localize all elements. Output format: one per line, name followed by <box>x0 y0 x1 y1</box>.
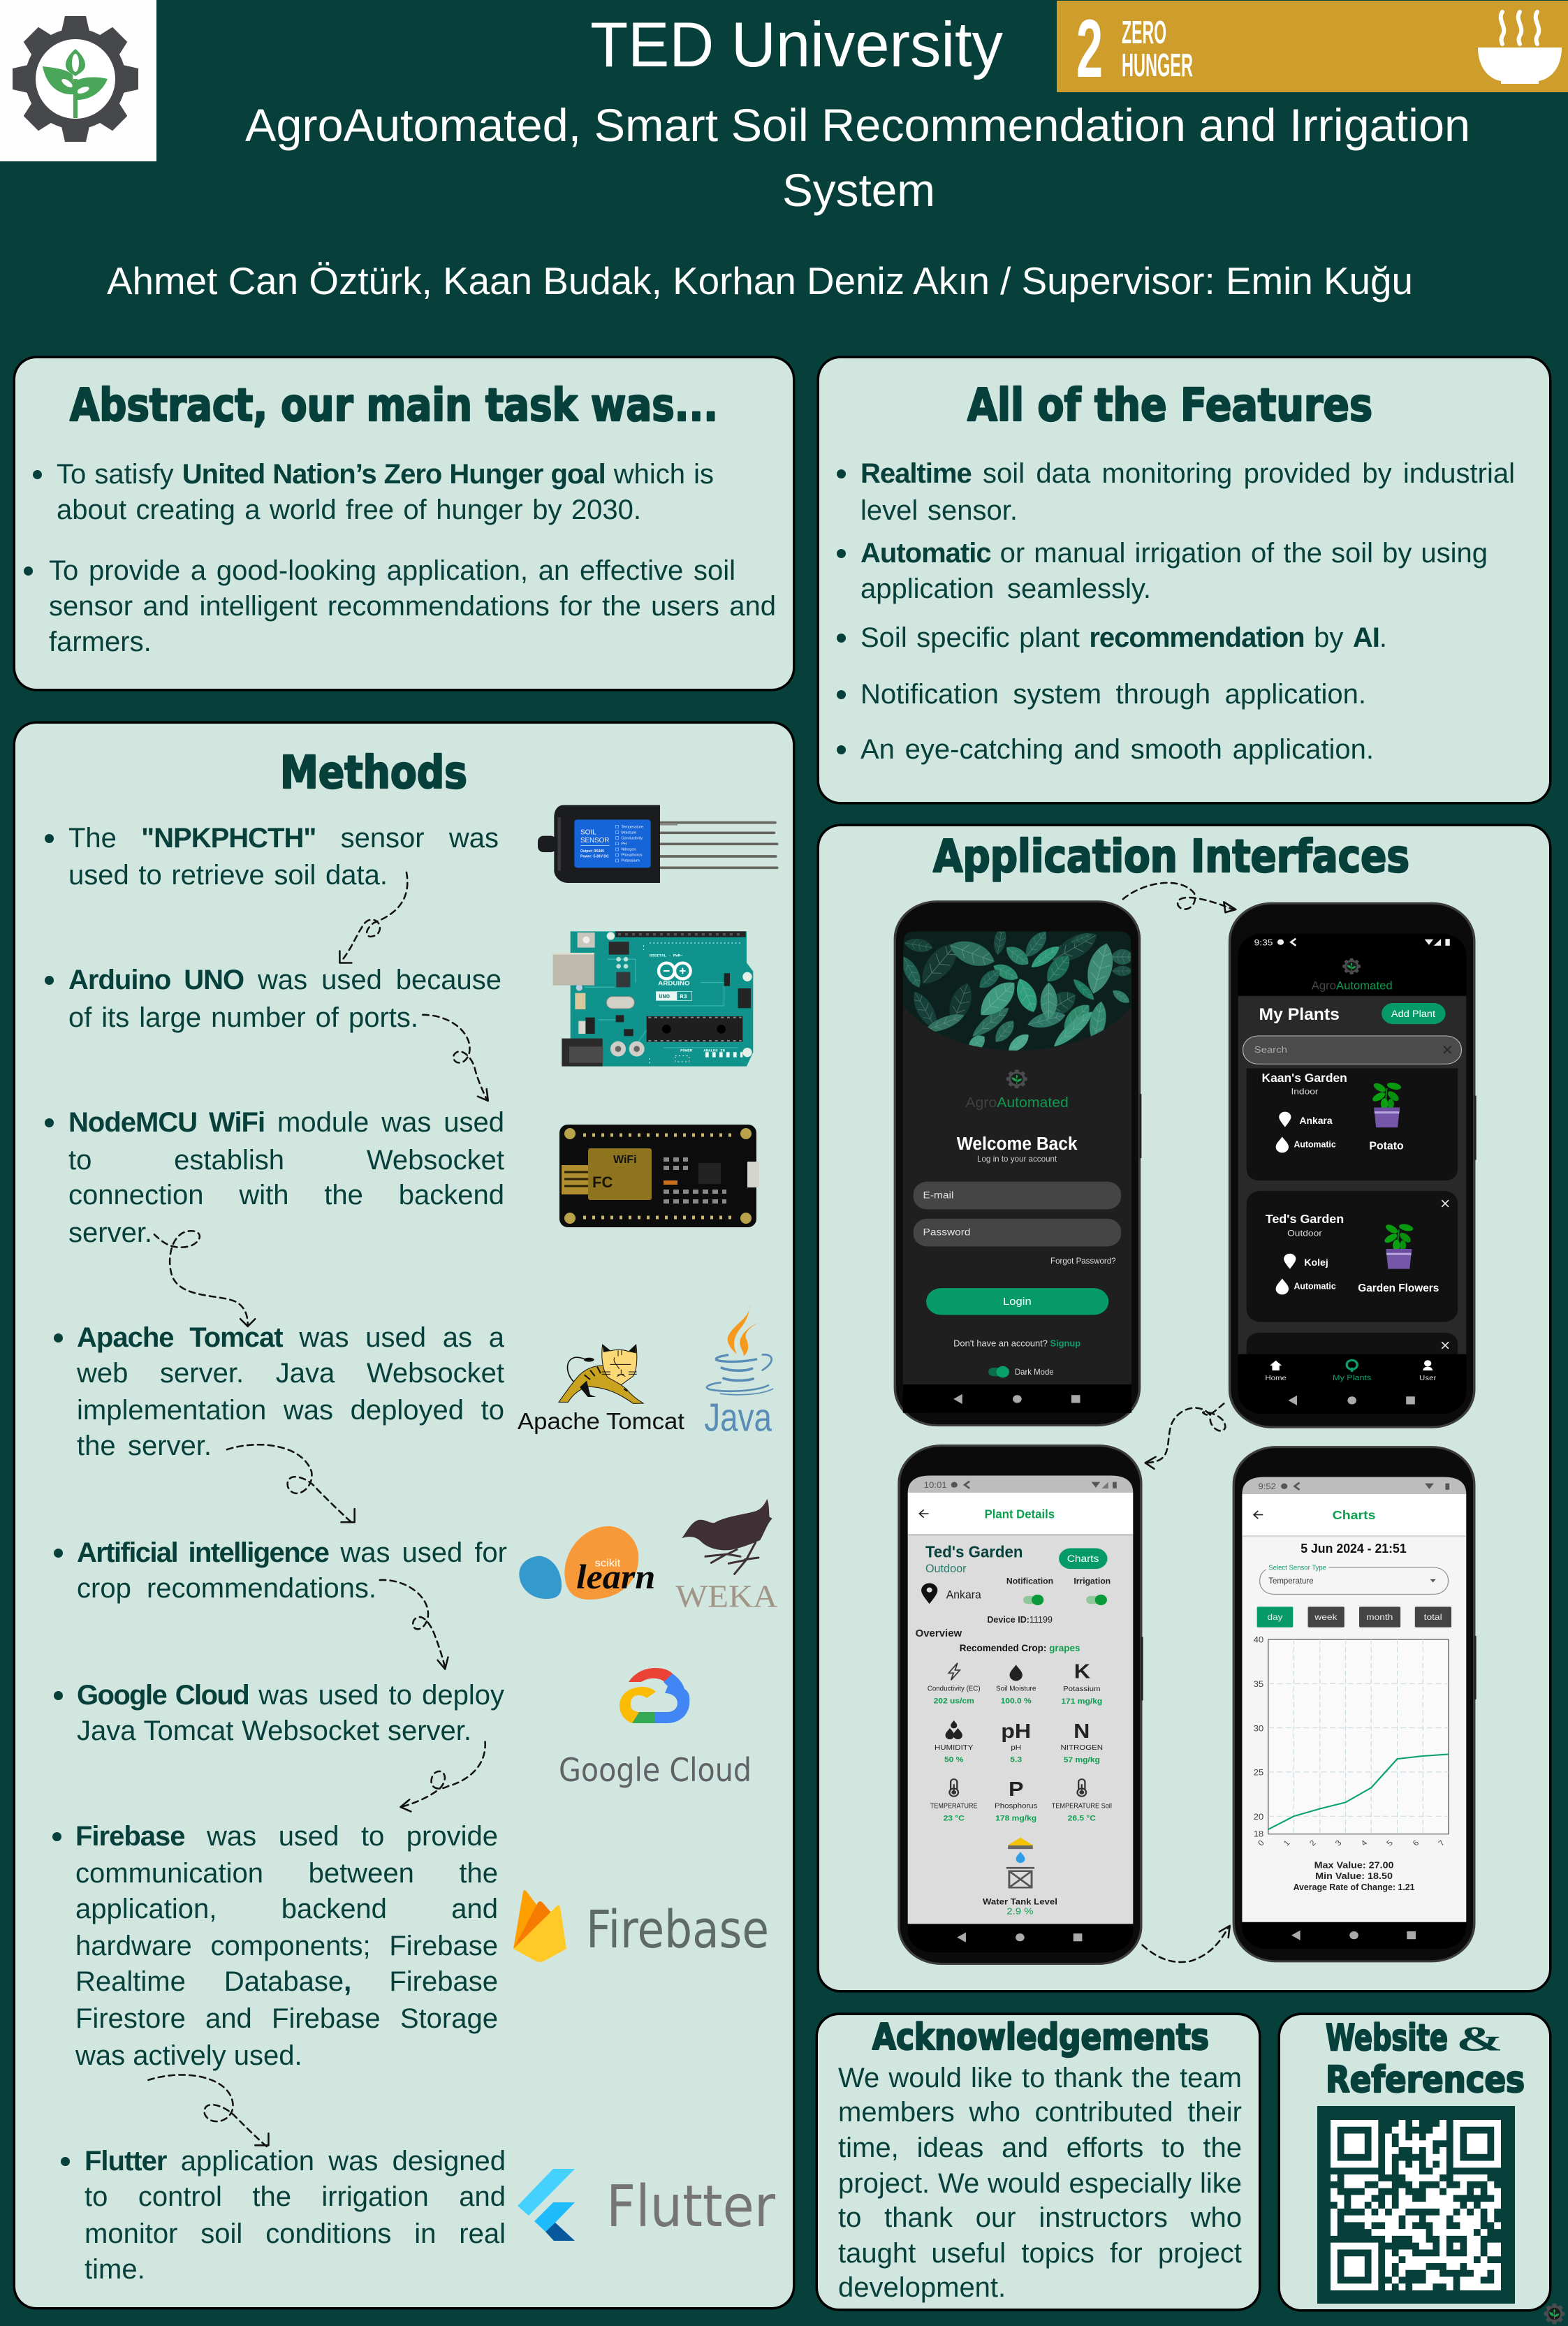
icon: scikit-learn: learn <box>576 1557 655 1596</box>
feature: realtime monitoring: level sensor. <box>860 495 1018 526</box>
icon: soil sensor <box>538 805 777 883</box>
icon: Apache Tomcat: Apache Tomcat <box>518 1409 685 1435</box>
method: artificial intelligence: crop recommendations. <box>77 1573 376 1604</box>
icon: Apache Tomcat <box>518 1345 685 1435</box>
phone: my plants screen: Outdoor <box>1287 1228 1323 1238</box>
phone: charts screen: 25 <box>1254 1768 1263 1777</box>
phone: plant details screen: 57 mg/kg <box>1064 1757 1100 1764</box>
phone: plant details screen: 171 mg/kg <box>1061 1698 1102 1706</box>
icon: soil sensor: PH <box>621 842 627 846</box>
phone: login screen <box>895 902 1141 1426</box>
feature: irrigation <box>837 538 1488 604</box>
panel: application interfaces <box>817 824 1552 1992</box>
acknowledgement text: to thank our instructors who <box>838 2202 1242 2233</box>
method: Firebase: application, backend and <box>75 1894 498 1924</box>
icon: soil sensor: Temperature <box>621 825 643 829</box>
method: Google Cloud <box>54 1680 504 1746</box>
phone: charts screen: 30 <box>1254 1724 1263 1733</box>
phone: plant details screen: Conductivity (EC) <box>928 1685 981 1692</box>
phone: plant details screen: 23 °C <box>944 1815 965 1822</box>
heading: website and references: References <box>1326 2059 1525 2101</box>
phone: plant details screen: K <box>1074 1660 1090 1683</box>
method: artificial intelligence <box>54 1537 507 1604</box>
phone: charts screen: 4 <box>1360 1839 1369 1848</box>
phone: plant details screen: Ankara <box>946 1588 981 1601</box>
method: Firebase: hardware components; Firebase <box>75 1931 498 1961</box>
panel: acknowledgements <box>816 2013 1261 2311</box>
abstract bullet 2: farmers. <box>49 627 152 657</box>
phone: login screen: Dark Mode <box>1015 1367 1054 1377</box>
phone: plant details screen: HUMIDITY <box>935 1743 973 1752</box>
phone: plant details screen: Device ID:11199 <box>987 1615 1053 1625</box>
phone: charts screen: 18 <box>1254 1829 1263 1838</box>
method: Apache Tomcat: Apache Tomcat was used as a <box>77 1322 504 1353</box>
subtitle: project name: AgroAutomated, Smart Soil Recommendation and Irrigation <box>245 99 1470 151</box>
icon: Google Cloud: Google Cloud <box>559 1751 752 1789</box>
phone: plant details screen: 2.9 % <box>1006 1906 1034 1916</box>
phone: my plants screen: Search <box>1254 1044 1287 1055</box>
phone: my plants screen: Add Plant <box>1391 1009 1436 1020</box>
abstract bullet 1 <box>33 459 714 525</box>
icon: soil sensor: SOIL <box>580 828 596 836</box>
phone: charts screen: Max Value: 27.00 <box>1314 1860 1394 1871</box>
phone: my plants screen: Kaan's Garden <box>1262 1071 1347 1085</box>
image: leaves header of login screen <box>904 932 1131 1051</box>
arrows: dashed flow between phones <box>1123 883 1236 1962</box>
method: NPKPHCTH sensor <box>45 823 499 891</box>
method: Apache Tomcat: implementation was deployed to <box>77 1395 504 1426</box>
phone: my plants screen: Automatic <box>1294 1281 1336 1292</box>
method: Firebase: Realtime Database, Firebase <box>75 1966 498 1997</box>
abstract bullet 2: sensor and intelligent recommendations for the users and <box>49 591 776 622</box>
icon: small gear watermark <box>1544 2304 1565 2325</box>
SDG 2 zero hunger banner: HUNGER <box>1122 47 1193 83</box>
phone: plant details screen: P <box>1009 1778 1023 1801</box>
method: NodeMCU WiFi: connection with the backend <box>68 1180 504 1210</box>
heading: website and references: Website <box>1326 2017 1448 2059</box>
method: Flutter: monitor soil conditions in real <box>85 2218 506 2249</box>
authors and supervisor: Ahmet Can Öztürk, Kaan Budak, Korhan Deniz Akın / Supervisor: Emin Kuğu <box>107 259 1413 302</box>
phone: login screen: Forgot Password? <box>1050 1256 1116 1266</box>
phone: my plants screen: Ted's Garden <box>1266 1213 1344 1227</box>
panel: abstract <box>13 356 795 692</box>
method: Firebase: Firebase was used to provide <box>75 1821 498 1852</box>
feature: realtime monitoring: Realtime soil data monitoring provided by industrial <box>860 458 1515 489</box>
phone: my plants screen <box>1230 903 1477 1427</box>
icon: WEKA bird: WEKA <box>675 1579 778 1614</box>
phone: charts screen: 2 <box>1308 1839 1318 1848</box>
phone: my plants screen: User <box>1419 1374 1437 1382</box>
phone: charts screen: 20 <box>1254 1812 1263 1822</box>
phone: plant details screen: Water Tank Level <box>983 1897 1057 1907</box>
phone: plant details screen: 10:01 <box>924 1480 947 1490</box>
phone: charts screen: 7 <box>1437 1839 1446 1848</box>
icon: Arduino UNO board: DIGITAL - PWM~ <box>650 953 683 958</box>
icon: NodeMCU WiFi module: FC <box>592 1173 613 1191</box>
phone: login screen: Welcome Back <box>957 1134 1078 1154</box>
method: Firebase <box>52 1821 498 2071</box>
phone: charts screen: 5 <box>1385 1839 1395 1848</box>
phone: charts screen: month <box>1366 1612 1393 1622</box>
phone: plant details screen: Overview <box>916 1628 962 1639</box>
method: NPKPHCTH sensor: used to retrieve soil data. <box>68 860 388 891</box>
phone: plant details screen: Plant Details <box>985 1507 1055 1521</box>
icon: soil sensor: Phosphorus <box>621 854 643 858</box>
heading: methods: Methods <box>280 747 467 799</box>
phone: charts screen: 40 <box>1254 1635 1263 1645</box>
acknowledgement text: We would like to thank the team <box>838 2063 1242 2093</box>
method: Arduino UNO: of its large number of ports. <box>68 1002 418 1033</box>
phone: my plants screen: Potato <box>1369 1140 1404 1152</box>
phone: charts screen: Select Sensor Type <box>1268 1565 1326 1572</box>
panel: website and references <box>1278 2013 1552 2312</box>
method: NPKPHCTH sensor: The "NPKPHCTH" sensor was <box>68 823 499 854</box>
acknowledgement text: taught useful topics for project <box>838 2238 1242 2269</box>
heading: website and references: & <box>1456 2019 1503 2058</box>
phone: login screen: Login <box>1003 1296 1032 1308</box>
phone: my plants screen: AgroAutomated <box>1312 979 1393 992</box>
icon: Arduino UNO board: ARDUINO <box>658 980 690 987</box>
feature: smooth application: An eye-catching and smooth application. <box>860 734 1374 765</box>
icon: Google Cloud <box>559 1668 752 1789</box>
phone: login screen: Log in to your account <box>977 1154 1057 1164</box>
abstract bullet 1: about creating a world free of hunger by 2030. <box>57 495 641 525</box>
feature: recommendation: Soil specific plant recommendation by AI. <box>860 622 1387 653</box>
phone: plant details screen <box>899 1446 1143 1963</box>
phone: charts screen: 1 <box>1282 1839 1292 1848</box>
method: Flutter: time. <box>85 2254 145 2285</box>
phone: plant details screen: Outdoor <box>925 1562 967 1575</box>
phone: plant details screen: TEMPERATURE <box>930 1802 978 1810</box>
phone: charts screen: Temperature <box>1268 1576 1314 1586</box>
method: NodeMCU WiFi <box>45 1107 504 1248</box>
phone: plant details screen: 50 % <box>944 1756 963 1764</box>
phone: charts screen: 3 <box>1334 1839 1344 1848</box>
icon: Arduino UNO board <box>553 931 753 1067</box>
icon: Flutter <box>518 2169 775 2241</box>
abstract bullet 2 <box>24 555 776 657</box>
phone: my plants screen: Automatic <box>1294 1139 1336 1149</box>
method: Google Cloud: Java Tomcat Websocket server. <box>77 1716 471 1746</box>
abstract bullet 2: To provide a good-looking application, an effective soil <box>49 555 735 586</box>
method: Apache Tomcat <box>54 1322 504 1461</box>
icon: NodeMCU WiFi module: WiFi <box>613 1154 637 1166</box>
icon: soil sensor: Power: 5-30V DC <box>580 855 609 859</box>
icon: soil sensor: Potassium <box>621 859 640 863</box>
phone: charts screen: Min Value: 18.50 <box>1315 1871 1393 1881</box>
phone: login screen: E-mail <box>923 1190 953 1201</box>
abstract bullet 1: To satisfy United Nation’s Zero Hunger goal which is <box>57 459 714 490</box>
phone: charts screen: Average Rate of Change: 1.21 <box>1294 1882 1415 1892</box>
icon: soil sensor: Conductivity <box>621 836 643 840</box>
phone: my plants screen: Garden Flowers <box>1358 1282 1439 1294</box>
arrows: dashed connectors between methods <box>148 872 488 2146</box>
icon: Java <box>704 1304 773 1440</box>
phone: charts screen: week <box>1314 1612 1338 1622</box>
icon: Firebase: Firebase <box>586 1900 769 1960</box>
panel: features <box>817 356 1552 805</box>
methods logos and dashed arrows <box>147 805 778 2241</box>
icon: soil sensor: Nitrogen <box>621 848 636 852</box>
phone: charts screen <box>1233 1447 1477 1961</box>
feature: notifications: Notification system through application. <box>860 679 1366 710</box>
phone: plant details screen: NITROGEN <box>1061 1743 1103 1752</box>
phone: plant details screen: Phosphorus <box>995 1802 1038 1810</box>
icon: Arduino UNO board: R3 <box>680 993 687 1000</box>
icon: soil sensor: SENSOR <box>580 837 609 844</box>
feature: irrigation: application seamlessly. <box>860 573 1151 604</box>
phone: charts screen: Charts <box>1333 1508 1375 1522</box>
feature: irrigation: Automatic or manual irrigation of the soil by using <box>860 538 1488 569</box>
phone: plant details screen: Ted's Garden <box>925 1543 1023 1561</box>
phone: plant details screen: Potassium <box>1063 1685 1101 1693</box>
method: Arduino UNO <box>45 965 501 1033</box>
acknowledgement text: project. We would especially like <box>838 2168 1242 2199</box>
phone: plant details screen: pH <box>1011 1743 1021 1752</box>
icon: Arduino UNO board: ANALOG IN <box>703 1048 725 1053</box>
heading: website and references <box>1326 2017 1525 2101</box>
icon: NodeMCU WiFi module <box>559 1125 759 1227</box>
phone: plant details screen: 178 mg/kg <box>995 1815 1036 1822</box>
icon: Java: Java <box>704 1396 772 1440</box>
subtitle: project name <box>245 99 1470 216</box>
method: Apache Tomcat: the server. <box>77 1431 212 1461</box>
phone: charts screen: total <box>1424 1612 1442 1622</box>
icon: Firebase <box>513 1890 769 1962</box>
phone: charts screen: 0 <box>1256 1839 1266 1848</box>
method: Apache Tomcat: web server. Java Websocket <box>77 1358 504 1389</box>
icon: scikit-learn: scikit <box>595 1558 620 1569</box>
method: Firebase: communication between the <box>75 1858 498 1889</box>
icon: soil sensor: Output: RS485 <box>580 849 604 854</box>
method: Flutter <box>61 2146 506 2285</box>
heading: acknowledgements: Acknowledgements <box>872 2017 1209 2058</box>
phone: my plants screen: My Plants <box>1259 1004 1340 1024</box>
method: Arduino UNO: Arduino UNO was used because <box>68 965 501 995</box>
method: Flutter: to control the irrigation and <box>85 2181 506 2212</box>
phone: login screen: Password <box>923 1227 971 1238</box>
QR code <box>1317 2106 1515 2304</box>
image: leaves header of login screen: 9:50 <box>920 938 934 946</box>
phone: my plants screen: Ankara <box>1299 1116 1333 1127</box>
phone: my plants screen: My Plants <box>1333 1373 1371 1382</box>
SDG 2 zero hunger banner <box>1057 1 1568 92</box>
phone: plant details screen: 100.0 % <box>1001 1697 1032 1705</box>
title: university name: TED University <box>590 10 1003 80</box>
phone: charts screen: 5 Jun 2024 - 21:51 <box>1300 1542 1407 1556</box>
method: NodeMCU WiFi: NodeMCU WiFi module was used <box>68 1107 504 1138</box>
icon: Arduino UNO board: UNO <box>659 993 670 1000</box>
method: Firebase: was actively used. <box>75 2040 302 2071</box>
phone: login screen: AgroAutomated <box>965 1094 1069 1111</box>
icon: WEKA bird <box>675 1499 778 1614</box>
phone: my plants screen: Indoor <box>1291 1086 1319 1096</box>
method: Flutter: Flutter application was designed <box>85 2146 506 2177</box>
acknowledgement text <box>838 2063 1242 2303</box>
logo: AgroAutomated gear <box>0 0 156 161</box>
phone: charts screen: 35 <box>1254 1680 1263 1689</box>
phone: plant details screen: N <box>1074 1720 1090 1743</box>
heading: abstract: Abstract, our main task was... <box>70 380 718 432</box>
SDG 2 zero hunger banner: ZERO <box>1122 14 1166 50</box>
phone: plant details screen: Notification <box>1006 1576 1053 1586</box>
method: NodeMCU WiFi: to establish Websocket <box>68 1145 504 1176</box>
icon: soil sensor: Moisture <box>621 831 636 835</box>
phone: plant details screen: Charts <box>1067 1554 1099 1565</box>
subtitle: project name: System <box>782 164 935 216</box>
phone: plant details screen: 202 us/cm <box>934 1697 974 1705</box>
phone: plant details screen: pH <box>1001 1720 1031 1743</box>
phone: plant details screen: TEMPERATURE Soil <box>1052 1802 1112 1810</box>
icon: scikit-learn <box>519 1526 655 1600</box>
phone: my plants screen: 9:35 <box>1254 937 1273 947</box>
feature: realtime monitoring <box>837 458 1515 526</box>
phone: charts screen: day <box>1267 1612 1283 1622</box>
heading: application interfaces: Application Interfaces <box>933 831 1409 883</box>
phone: login screen: Don't have an account? Signup <box>953 1338 1080 1348</box>
phone: my plants screen: Kolej <box>1304 1257 1328 1268</box>
phone: plant details screen: 5.3 <box>1010 1756 1022 1764</box>
icon: Flutter: Flutter <box>606 2174 775 2240</box>
SDG 2 zero hunger banner: 2 <box>1076 3 1103 95</box>
method: NodeMCU WiFi: server. <box>68 1217 152 1248</box>
heading: features: All of the Features <box>967 380 1372 432</box>
acknowledgement text: development. <box>838 2272 1006 2303</box>
acknowledgement text: time, ideas and efforts to the <box>838 2133 1242 2163</box>
acknowledgement text: members who contributed their <box>838 2097 1242 2128</box>
panel: methods <box>13 721 795 2309</box>
phone: plant details screen: Irrigation <box>1074 1576 1111 1586</box>
phone: plant details screen: 26.5 °C <box>1068 1815 1096 1822</box>
phone: charts screen: 9:52 <box>1258 1482 1276 1491</box>
method: Firebase: Firestore and Firebase Storage <box>75 2003 498 2034</box>
method: Google Cloud: Google Cloud was used to deploy <box>77 1680 504 1711</box>
method: artificial intelligence: Artificial intelligence was used for <box>77 1537 507 1568</box>
icon: Arduino UNO board: POWER <box>680 1048 693 1053</box>
phone: my plants screen: Home <box>1265 1374 1287 1382</box>
phone: charts screen: 6 <box>1412 1839 1421 1848</box>
phone: plant details screen: Soil Moisture <box>996 1685 1036 1692</box>
phone: plant details screen: Recomended Crop: grapes <box>960 1644 1080 1654</box>
